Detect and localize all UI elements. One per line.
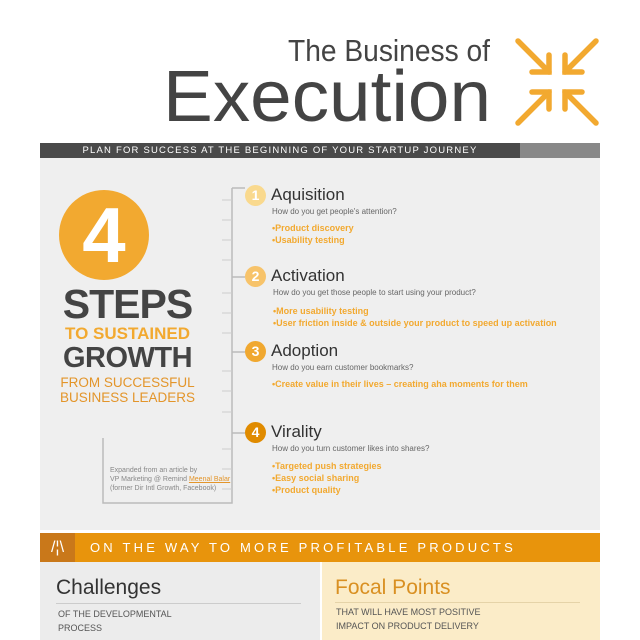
- header bar: PLAN FOR SUCCESS AT THE BEGINNING OF YOUR STARTUP JOURNEY: [82, 145, 477, 156]
- title: Execution: [163, 57, 491, 137]
- credit text: [110, 466, 230, 492]
- credit text: Expanded from an article by: [110, 467, 197, 474]
- icon: big number 4: [59, 190, 149, 280]
- credit text: VP Marketing @ Remind Meenal Balar: [110, 476, 230, 483]
- headline text: TO SUSTAINED: [65, 324, 190, 343]
- panel: focal points: Focal Points: [335, 576, 451, 599]
- text: Virality: [271, 422, 322, 441]
- header bar: [40, 143, 600, 158]
- text: Adoption: [271, 341, 338, 360]
- panel: challenges: Challenges: [56, 576, 161, 599]
- text: •Product quality: [272, 485, 341, 495]
- text: 2: [252, 268, 259, 284]
- text: Aquisition: [271, 185, 345, 204]
- text: 1: [252, 187, 259, 203]
- headline text: BUSINESS LEADERS: [60, 390, 195, 405]
- icon: road: /¦\: [51, 539, 64, 556]
- panel: focal points: [322, 562, 600, 640]
- orange banner: [40, 533, 600, 562]
- text: 4: [252, 424, 259, 440]
- panel: steps: [40, 158, 600, 530]
- text: •User friction inside & outside your product to speed up activation: [273, 318, 557, 328]
- text: How do you earn customer bookmarks?: [272, 363, 413, 372]
- panel: challenges: PROCESS: [58, 623, 102, 633]
- text: •Product discovery: [272, 223, 354, 233]
- text: How do you get people's attention?: [272, 207, 397, 216]
- icon: converging arrows: [515, 38, 599, 126]
- step 4: [245, 422, 430, 495]
- headline text: [60, 281, 195, 405]
- panel: challenges: [40, 562, 320, 640]
- headline text: FROM SUCCESSFUL: [60, 375, 195, 390]
- step 1: [245, 185, 397, 245]
- text: How do you get those people to start using your product?: [273, 288, 476, 297]
- icon: big number 4: 4: [82, 191, 126, 279]
- text: •Usability testing: [272, 235, 345, 245]
- step 3: [245, 341, 528, 389]
- icon: road: [40, 533, 75, 562]
- title: The Business of: [288, 33, 490, 68]
- panel: focal points: THAT WILL HAVE MOST POSITIVE: [336, 607, 481, 617]
- text: •Easy social sharing: [272, 473, 359, 483]
- orange banner: ON THE WAY TO MORE PROFITABLE PRODUCTS: [90, 540, 516, 555]
- text: Activation: [271, 266, 345, 285]
- text: How do you turn customer likes into shares?: [272, 444, 429, 453]
- headline text: STEPS: [63, 281, 192, 327]
- credit text: (former Dir Intl Growth, Facebook): [110, 485, 216, 492]
- text: 3: [252, 343, 259, 359]
- panel: focal points: IMPACT ON PRODUCT DELIVERY: [336, 621, 479, 631]
- step 2: [245, 266, 557, 328]
- text: •Targeted push strategies: [272, 461, 382, 471]
- text: •Create value in their lives – creating aha moments for them: [272, 379, 528, 389]
- headline text: GROWTH: [63, 342, 192, 374]
- panel: challenges: OF THE DEVELOPMENTAL: [58, 609, 172, 619]
- text: •More usability testing: [273, 306, 369, 316]
